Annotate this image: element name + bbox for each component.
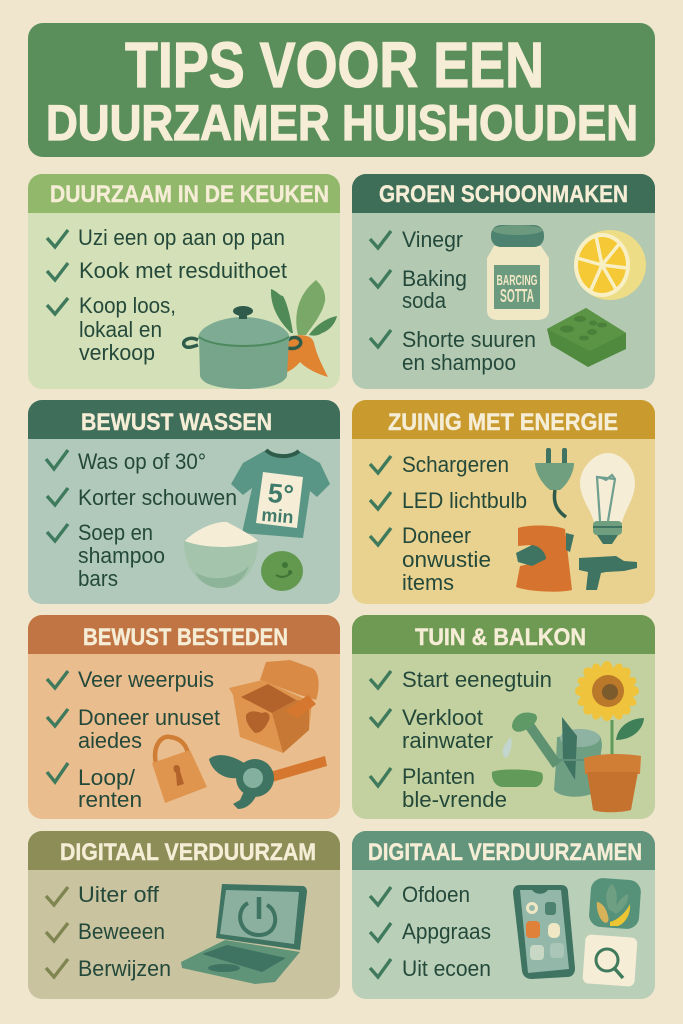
tip 2: Kook met resduithoet bbox=[79, 258, 287, 283]
tip 1: Uiter off bbox=[78, 882, 160, 907]
panel: bewust besteden bbox=[28, 615, 340, 819]
icon: lemon bbox=[574, 230, 646, 300]
tip 1 bbox=[46, 882, 160, 907]
icon: drill bbox=[579, 556, 637, 590]
icon: light bulb bbox=[580, 453, 635, 544]
heading: DIGITAAL VERDUURZAMEN bbox=[368, 839, 642, 866]
tip 1 bbox=[370, 882, 470, 907]
icon: t-shirt with wash label bbox=[231, 450, 330, 538]
tip 3: renten bbox=[78, 787, 142, 812]
icon: t-shirt with wash label: 5° bbox=[267, 478, 295, 510]
tip 3 bbox=[47, 293, 176, 365]
icon: watering can bbox=[512, 712, 602, 797]
tip 3: ble-vrende bbox=[402, 787, 507, 812]
tip 2 bbox=[370, 266, 467, 313]
title line 1: TIPS VOOR EEN bbox=[125, 29, 544, 101]
tip 2: Doneer unuset bbox=[78, 705, 220, 730]
tip 2: Verkloot bbox=[402, 705, 483, 730]
tip 3: Shorte suuren bbox=[402, 327, 536, 352]
panel: bewust wassen bbox=[28, 400, 340, 604]
tip 1: Uzi een op aan op pan bbox=[78, 225, 285, 250]
tip 3: Doneer bbox=[402, 523, 471, 548]
tip 3: Loop/ bbox=[78, 765, 136, 790]
panel: tuin & balkon bbox=[352, 615, 655, 819]
icon: smartphone with apps bbox=[513, 885, 575, 979]
tip 3 bbox=[47, 763, 142, 812]
icon: soap dish bbox=[492, 769, 543, 787]
tip 2 bbox=[370, 705, 493, 753]
panel: zuinig met energie bbox=[352, 400, 655, 604]
tip 2: Beweeen bbox=[78, 919, 165, 944]
tip 3 bbox=[370, 523, 491, 595]
tip 3: Soep en bbox=[78, 520, 153, 545]
tip 3 bbox=[47, 520, 165, 591]
tip 3 bbox=[370, 327, 536, 375]
panel: digitaal verduurzamen bbox=[352, 831, 655, 999]
tip 3: items bbox=[402, 570, 454, 595]
icon: leaf app tile bbox=[588, 877, 642, 930]
tip 1: Start eenegtuin bbox=[402, 667, 552, 692]
icon: baking soda jar bbox=[487, 225, 549, 320]
tip 2: aiedes bbox=[78, 728, 142, 753]
title banner bbox=[28, 23, 655, 157]
heading: ZUINIG MET ENERGIE bbox=[388, 409, 618, 436]
tip 1: Was op of 30° bbox=[78, 449, 206, 474]
tip 1: Veer weerpuis bbox=[78, 667, 214, 692]
tip 3: bars bbox=[78, 566, 118, 591]
heading: DUURZAAM IN DE KEUKEN bbox=[50, 181, 329, 208]
icon: search tile bbox=[582, 934, 638, 987]
heading: TUIN & BALKON bbox=[415, 624, 586, 651]
tip 2: Appgraas bbox=[402, 919, 491, 944]
icon: orange hand mixer bbox=[516, 525, 574, 592]
heading: BEWUST BESTEDEN bbox=[83, 624, 288, 651]
icon: plug bbox=[535, 448, 574, 517]
icon: laptop with power symbol bbox=[181, 884, 307, 984]
tip 3: shampoo bbox=[78, 543, 165, 568]
panel: digitaal verduurzam bbox=[28, 831, 340, 999]
tip 3: Berwijzen bbox=[78, 956, 171, 981]
tip 3: Planten bbox=[402, 764, 475, 789]
tip 3: Koop loos, bbox=[79, 293, 176, 318]
heading: DIGITAAL VERDUURZAM bbox=[60, 839, 316, 866]
tip 3 bbox=[370, 764, 507, 812]
icon: padlock bbox=[152, 737, 207, 803]
icon: bowl of powder bbox=[184, 522, 258, 588]
icon: pot with carrot bbox=[184, 280, 337, 389]
icon: t-shirt with wash label: min bbox=[261, 505, 294, 527]
icon: water drops bbox=[503, 737, 512, 758]
tip 3: verkoop bbox=[79, 340, 155, 365]
tip 3: onwustie bbox=[402, 547, 491, 572]
tip 2 bbox=[47, 705, 220, 753]
tip 2: Baking bbox=[402, 266, 467, 291]
tip 3: en shampoo bbox=[402, 350, 516, 375]
icon: baking soda jar: SOTTA bbox=[500, 286, 534, 306]
heading: GROEN SCHOONMAKEN bbox=[379, 181, 628, 208]
tip 1 bbox=[370, 227, 463, 252]
tip 2: rainwater bbox=[402, 728, 493, 753]
tip 3: Uit ecoen bbox=[402, 956, 491, 981]
tip 2: Korter schouwen bbox=[78, 485, 237, 510]
tip 1: Schargeren bbox=[402, 452, 509, 477]
icon: soap bar bbox=[261, 551, 303, 591]
icon: sunflower in pot bbox=[575, 661, 644, 812]
icon: sponge bbox=[547, 308, 626, 367]
panel: groen schoonmaken bbox=[352, 174, 655, 389]
heading: BEWUST WASSEN bbox=[81, 409, 272, 436]
tip 3: lokaal en bbox=[79, 317, 162, 342]
tip 1: Vinegr bbox=[402, 227, 463, 252]
icon: magnifier tool bbox=[209, 755, 327, 809]
tip 2: LED lichtbulb bbox=[402, 488, 527, 513]
tip 1: Ofdoen bbox=[402, 882, 470, 907]
panel: duurzaam in de keuken bbox=[28, 174, 340, 389]
tip 2: soda bbox=[402, 288, 447, 313]
icon: cardboard box bbox=[229, 660, 319, 753]
icon: baking soda jar: BARCING bbox=[496, 272, 538, 289]
